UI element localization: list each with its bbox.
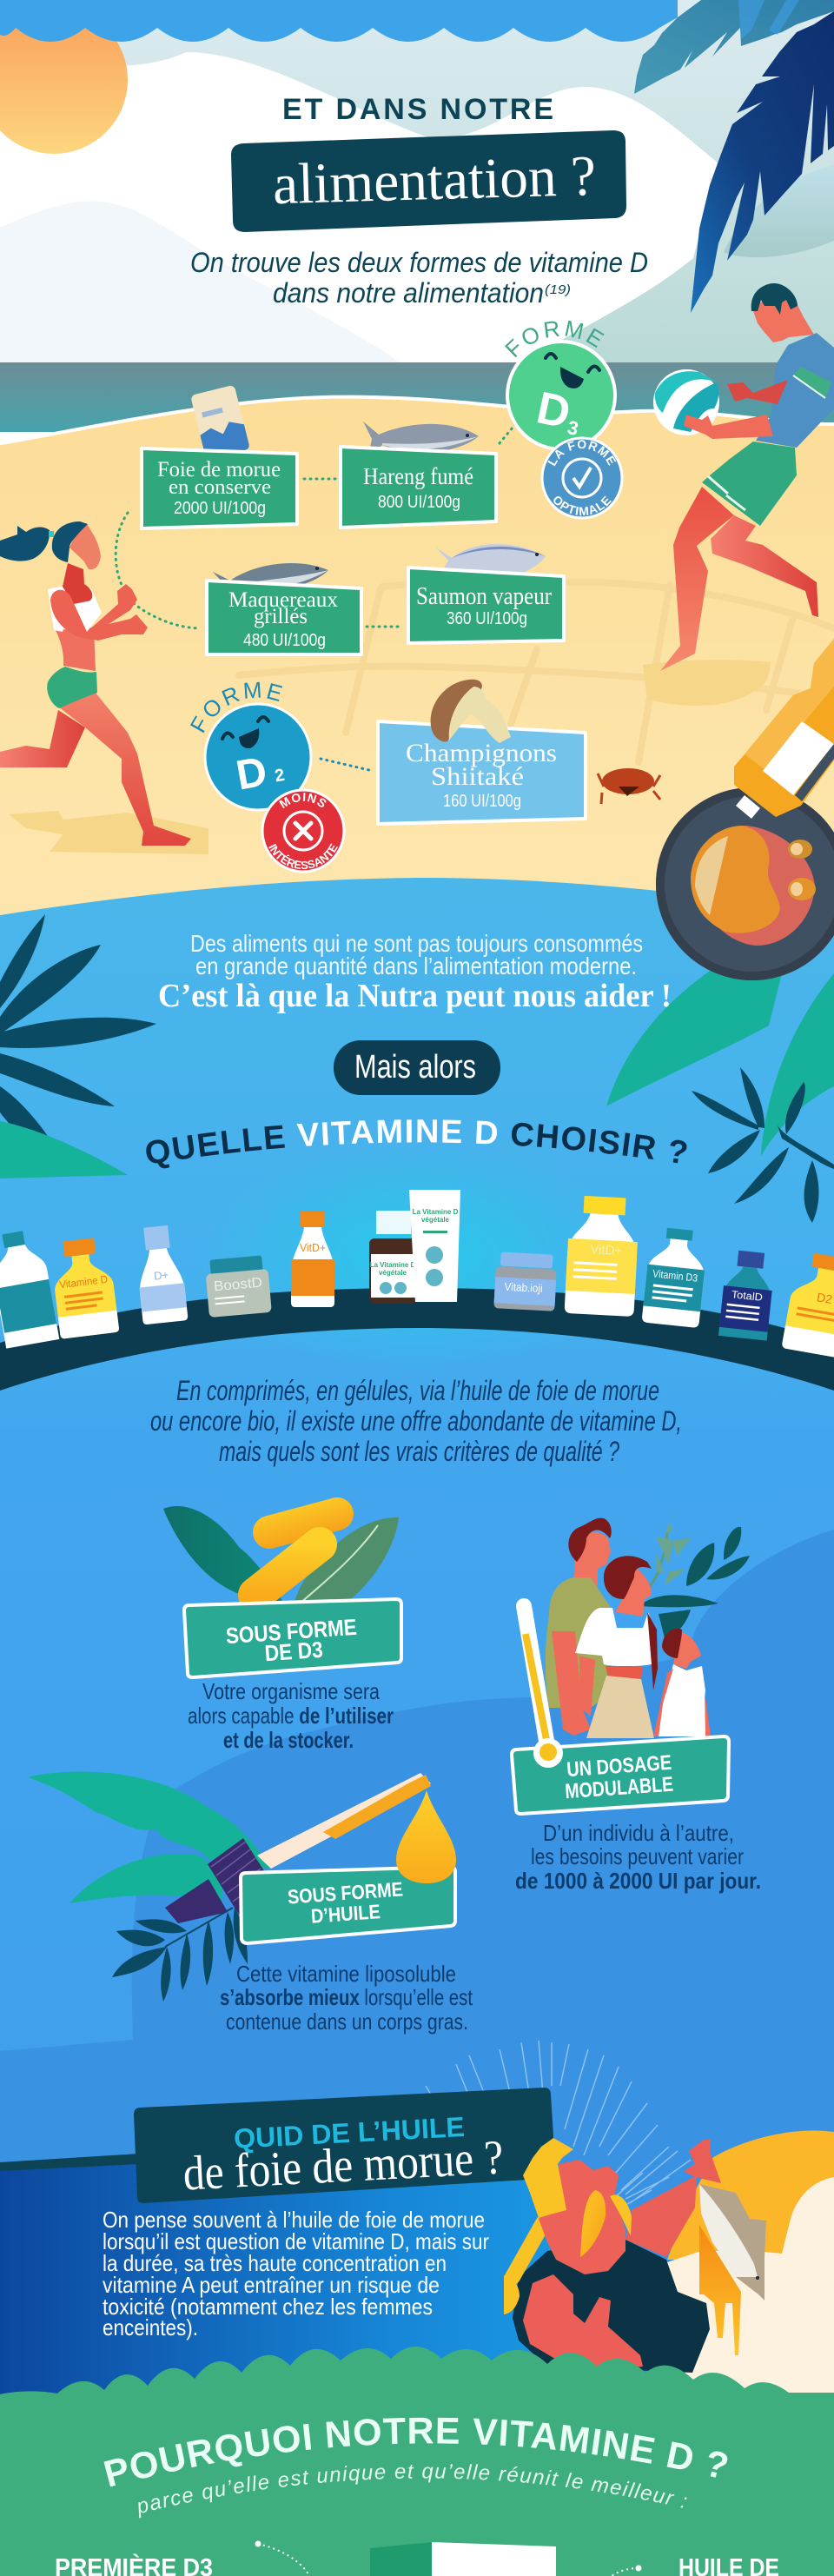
blue sky patches over palm xyxy=(738,0,799,39)
badge: moins interessante xyxy=(261,789,346,873)
illustration: leaves and capsules xyxy=(163,1506,399,1608)
text block: D3 explanation: Votre organisme sera xyxy=(202,1678,380,1704)
product: TotalD navy xyxy=(718,1249,776,1341)
panel: green section xyxy=(0,2347,834,2576)
thermometer bulb over sign xyxy=(533,1738,563,1768)
product: yellow big bottle: VitD+ xyxy=(590,1242,623,1258)
pill: mais alors xyxy=(334,1040,500,1095)
icon: herring xyxy=(363,422,479,456)
sign: un dosage modulable: UN DOSAGE xyxy=(566,1751,672,1782)
icon: thermometer xyxy=(524,1606,563,1768)
background glow behind products xyxy=(200,1143,634,1369)
product: Vitab jar: Vitab.ioji xyxy=(504,1280,543,1295)
illustration: cod fish xyxy=(699,2184,766,2300)
icon: form D3 pill: 3 xyxy=(566,416,580,440)
product: vitamine D yellow: Vitamine D xyxy=(59,1273,109,1291)
product box xyxy=(370,2542,556,2576)
card: champignons shiitake: Shiitaké xyxy=(431,762,524,791)
product: TotalD navy: TotalD xyxy=(731,1288,764,1304)
heading box: alimentation xyxy=(231,130,626,232)
card: saumon vapeur xyxy=(408,568,564,643)
product: D2 yellow: D2 xyxy=(816,1290,834,1306)
text block: D3 explanation xyxy=(188,1678,394,1753)
product: BoostD jar: BoostD xyxy=(213,1276,263,1294)
text block: two forms intro: On trouve les deux formes de vitamine D xyxy=(190,247,648,278)
text block: two forms intro: (19) xyxy=(545,282,571,297)
card: maquereaux grilles: grillés xyxy=(254,605,308,628)
decorative wave band xyxy=(0,0,678,42)
text block: cod liver oil warning: toxicité (notamment chez les femmes xyxy=(103,2294,433,2320)
card: maquereaux grilles: Maquereaux xyxy=(228,588,338,612)
heading box: quid de l'huile xyxy=(134,2088,556,2203)
badge: la forme optimale: OPTIMALE xyxy=(553,495,612,516)
product: VitD+: VitD+ xyxy=(300,1241,326,1254)
icon: dark fern right xyxy=(692,1067,834,1223)
illustration: frying pan xyxy=(656,787,834,980)
illustration: yellow sun and cream blob xyxy=(643,2130,834,2399)
sand shadows xyxy=(9,660,771,854)
text block: two forms intro xyxy=(190,247,648,309)
text block: foods not always eaten: Des aliments qui ne sont pas toujours consommés xyxy=(190,930,643,957)
panel: blue section background xyxy=(0,878,834,2576)
icon: tin of cod liver xyxy=(190,385,250,460)
product: D+ white: D+ xyxy=(153,1268,169,1283)
icon: form D3 pill: D xyxy=(533,382,575,439)
product: tube xyxy=(409,1190,460,1302)
icon: crab xyxy=(598,768,660,804)
badge: la forme optimale: LA FORME xyxy=(547,440,617,466)
text block: cod liver oil warning: la durée, sa très haute concentration en xyxy=(103,2250,447,2276)
icon: oil drop xyxy=(396,1790,456,1883)
pill: mais alors: Mais alors xyxy=(354,1049,476,1086)
icon: shiitake mushroom xyxy=(431,680,511,743)
badge: moins interessante: INTÉRESSANTE xyxy=(268,843,338,869)
sign: un dosage modulable: MODULABLE xyxy=(564,1773,674,1803)
dotted connector D2 xyxy=(321,759,373,771)
icon: form D2 pill xyxy=(190,681,313,812)
icon: dark palm fronds left xyxy=(0,914,156,1178)
text block: dosage explanation: de 1000 à 2000 UI par jour. xyxy=(515,1868,761,1894)
badge: moins interessante: MOINS xyxy=(279,793,327,808)
text block: cod liver oil warning: On pense souvent à l’huile de foie de morue xyxy=(103,2207,485,2233)
card: maquereaux grilles: 480 UI/100g xyxy=(243,631,326,650)
arm holding ball xyxy=(684,415,773,439)
text block: cod liver oil warning: vitamine A peut entraîner un risque de xyxy=(103,2272,440,2298)
sign: sous forme de D3: SOUS FORME xyxy=(225,1614,358,1649)
illustration: runner xyxy=(0,521,191,846)
icon: mackerel xyxy=(213,563,328,595)
sign: sous forme d'huile xyxy=(241,1867,455,1943)
product: dropper bottle: végétale xyxy=(379,1269,407,1277)
illustration: woman with cod xyxy=(504,2138,721,2373)
dotted connectors xyxy=(116,417,521,628)
darker blue backdrop shapes xyxy=(0,1530,834,2399)
panel: beach sky background xyxy=(0,0,834,374)
heading box: alimentation: alimentation ? xyxy=(272,144,597,216)
text block: foods not always eaten xyxy=(190,930,643,979)
volleyball net shadow xyxy=(239,582,834,762)
text block: two forms intro: dans notre alimentation xyxy=(273,277,544,309)
product: vitamin D3 teal xyxy=(641,1226,709,1328)
illustration: oil bottle xyxy=(734,639,834,830)
text block: dosage explanation: D’un individu à l’autre, xyxy=(543,1820,734,1846)
product: teal bottle left xyxy=(0,1228,59,1349)
card: hareng fume: 800 UI/100g xyxy=(378,493,460,512)
icon: palm fronds top right xyxy=(634,0,834,94)
product: vitamin D3 teal: Vitamin D3 xyxy=(652,1267,698,1285)
heading: et dans notre: ET DANS NOTRE xyxy=(282,93,553,126)
text block: cod liver oil warning xyxy=(103,2207,489,2340)
callout: la nutra: C’est là que la Nutra peut nous aider ! xyxy=(158,978,672,1014)
card: foie de morue: Foie de morue xyxy=(157,458,281,481)
card: champignons shiitake xyxy=(378,721,586,824)
shelf xyxy=(0,1288,834,1391)
sign: sous forme d'huile: D’HUILE xyxy=(310,1900,381,1928)
icon: form D3 pill xyxy=(505,320,617,450)
products row xyxy=(0,1190,834,1358)
icon: form D3 pill: FORME xyxy=(505,320,605,358)
heading: quelle vitamine D choisir: QUELLE VITAMINE D CHOISIR ? xyxy=(146,1119,686,1168)
illustration: family xyxy=(546,1518,750,1738)
product: D2 yellow xyxy=(781,1251,834,1358)
card: maquereaux grilles xyxy=(207,581,361,654)
badge: la forme optimale xyxy=(540,436,624,520)
product: vitamine D yellow xyxy=(49,1236,119,1339)
dotted pointers xyxy=(258,2544,639,2576)
icon: form D2 pill: D xyxy=(233,748,270,800)
sign: un dosage modulable xyxy=(512,1736,729,1814)
text block: foods not always eaten: en grande quantité dans l’alimentation moderne. xyxy=(195,953,637,979)
text block: dosage explanation: les besoins peuvent varier xyxy=(531,1843,744,1869)
card: saumon vapeur: 360 UI/100g xyxy=(447,609,527,628)
icon: volleyball xyxy=(653,369,719,435)
sign: sous forme de D3: DE D3 xyxy=(264,1637,324,1666)
icon: form D2 pill: 2 xyxy=(274,766,286,786)
icon: navy palm frond xyxy=(691,11,834,313)
card: hareng fume: Hareng fumé xyxy=(363,463,473,489)
card: champignons shiitake: Champignons xyxy=(406,739,557,767)
card: foie de morue xyxy=(142,448,297,528)
text block: D3 explanation: alors capable de l’utiliser xyxy=(188,1703,394,1729)
product: tube: La Vitamine D xyxy=(413,1208,459,1216)
product: dropper bottle: La Vitamine D xyxy=(370,1261,416,1269)
illustration: oil drip xyxy=(699,2225,741,2355)
text block: oil form explanation: Cette vitamine liposoluble xyxy=(236,1961,456,1987)
text block: oil form explanation xyxy=(220,1961,473,2035)
product: tube: végétale xyxy=(421,1216,450,1224)
text block: dosage explanation xyxy=(515,1820,761,1894)
subheading: unique: parce qu’elle est unique et qu’elle réunit le meilleur : xyxy=(138,2464,687,2519)
card: saumon vapeur: Saumon vapeur xyxy=(416,583,553,610)
icon: form D2 pill: FORME xyxy=(190,681,283,734)
text block: oil form explanation: contenue dans un corps gras. xyxy=(226,2008,468,2035)
text block: quality criteria intro xyxy=(150,1375,682,1467)
product: D+ white xyxy=(133,1225,189,1325)
product: VitD+ xyxy=(291,1212,334,1307)
card: champignons shiitake: 160 UI/100g xyxy=(443,792,521,811)
product: yellow big bottle xyxy=(564,1195,640,1317)
text block: cod liver oil warning: lorsqu’il est question de vitamine D, mais sur xyxy=(103,2228,489,2254)
heading: pourquoi notre vitamine D: POURQUOI NOTRE VITAMINE D ? xyxy=(104,2418,728,2487)
product: dropper bottle xyxy=(369,1211,417,1304)
product: Vitab jar xyxy=(493,1251,558,1311)
illustration: dropper xyxy=(165,1773,431,1923)
sun rays xyxy=(426,2041,691,2208)
text block: oil form explanation: s’absorbe mieux lorsqu’elle est xyxy=(220,1984,473,2010)
card: foie de morue: 2000 UI/100g xyxy=(174,499,266,518)
text block: cod liver oil warning: enceintes). xyxy=(103,2314,198,2340)
illustration: volleyball player xyxy=(660,283,834,671)
text block: D3 explanation: et de la stocker. xyxy=(223,1727,354,1753)
product: BoostD jar xyxy=(204,1255,272,1318)
text block: quality criteria intro: En comprimés, en gélules, via l’huile de foie de morue xyxy=(176,1375,659,1406)
panel: sand xyxy=(0,397,834,956)
text block: quality criteria intro: mais quels sont les vrais critères de qualité ? xyxy=(219,1436,619,1467)
heading box: quid de l'huile: QUID DE L’HUILE xyxy=(233,2111,466,2154)
illustration: dark fern xyxy=(112,1908,248,2002)
sign: sous forme d'huile: SOUS FORME xyxy=(287,1877,404,1909)
panel: sea xyxy=(0,362,834,432)
card: hareng fume xyxy=(341,447,496,528)
icon: salmon xyxy=(436,544,546,584)
illustration: teal leaves behind dropper xyxy=(28,1771,269,1903)
sign: sous forme de D3 xyxy=(184,1599,401,1677)
card: foie de morue: en conserve xyxy=(169,476,271,499)
icon: sun xyxy=(0,6,128,154)
pointer dots xyxy=(255,2541,641,2571)
heading box: quid de l'huile: de foie de morue ? xyxy=(182,2130,505,2201)
panel: deep blue cod liver section xyxy=(0,2154,556,2399)
illustration: teal fronds behind pan xyxy=(606,956,834,1156)
